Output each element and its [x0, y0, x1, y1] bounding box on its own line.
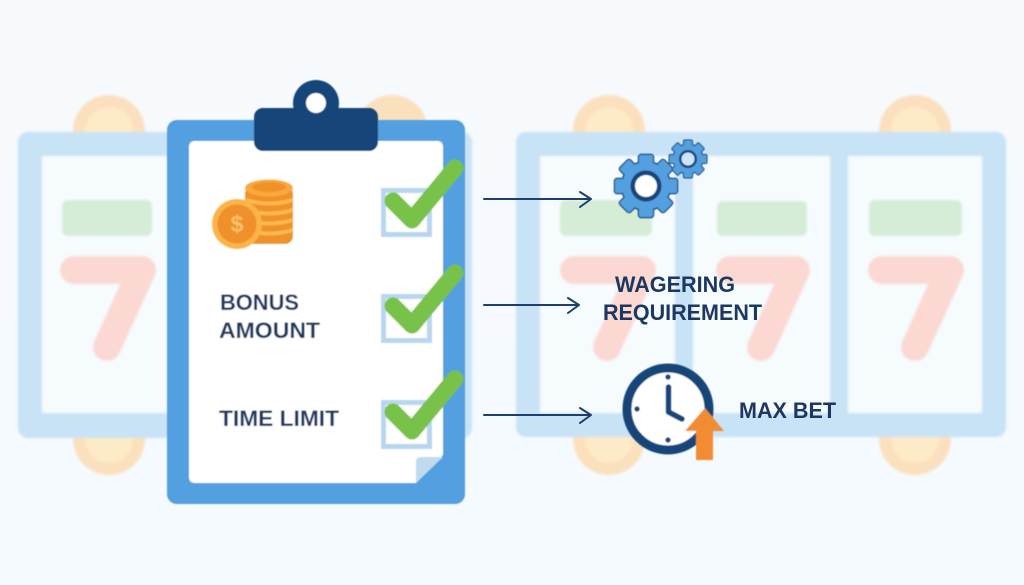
large gear	[615, 155, 677, 217]
arrow to gears	[484, 192, 591, 207]
label: wagering requirement	[603, 272, 763, 325]
clock ticks	[634, 374, 671, 443]
checkbox 3	[384, 379, 455, 446]
backdrop: green bars	[62, 200, 962, 236]
label: wagering requirement: REQUIREMENT	[603, 300, 763, 325]
arrow to clock	[484, 408, 591, 423]
label: wagering requirement: WAGERING	[615, 272, 735, 297]
label: bonus amount: AMOUNT	[219, 318, 321, 343]
arrow to wagering requirement	[484, 298, 579, 313]
icon: clock with orange arrow	[627, 368, 724, 460]
folded corner	[416, 457, 443, 483]
clipboard clip	[254, 80, 378, 151]
backdrop: orange reel knobs	[73, 95, 951, 475]
backdrop: right slot frame	[516, 132, 1006, 437]
orange up arrow	[685, 408, 724, 460]
clipboard board	[167, 120, 465, 504]
backdrop: left slot frame	[18, 132, 472, 438]
label: bonus amount: BONUS	[220, 290, 299, 315]
checkbox 2	[384, 273, 455, 340]
icon: gears	[615, 140, 706, 217]
label: time limit: TIME LIMIT	[219, 406, 340, 431]
clipboard	[167, 80, 465, 504]
icon: coin stack: $	[231, 211, 244, 237]
blurred slot machine backdrop	[18, 95, 1006, 475]
icon: coin stack	[212, 180, 293, 249]
backdrop: red sevens	[74, 270, 950, 347]
small gear	[670, 140, 706, 178]
clock face	[627, 368, 709, 450]
label: max bet: MAX BET	[739, 398, 837, 423]
clock hands	[668, 387, 682, 419]
checkbox 1	[384, 168, 455, 234]
paper sheet	[189, 141, 443, 483]
label: bonus amount	[219, 290, 321, 343]
